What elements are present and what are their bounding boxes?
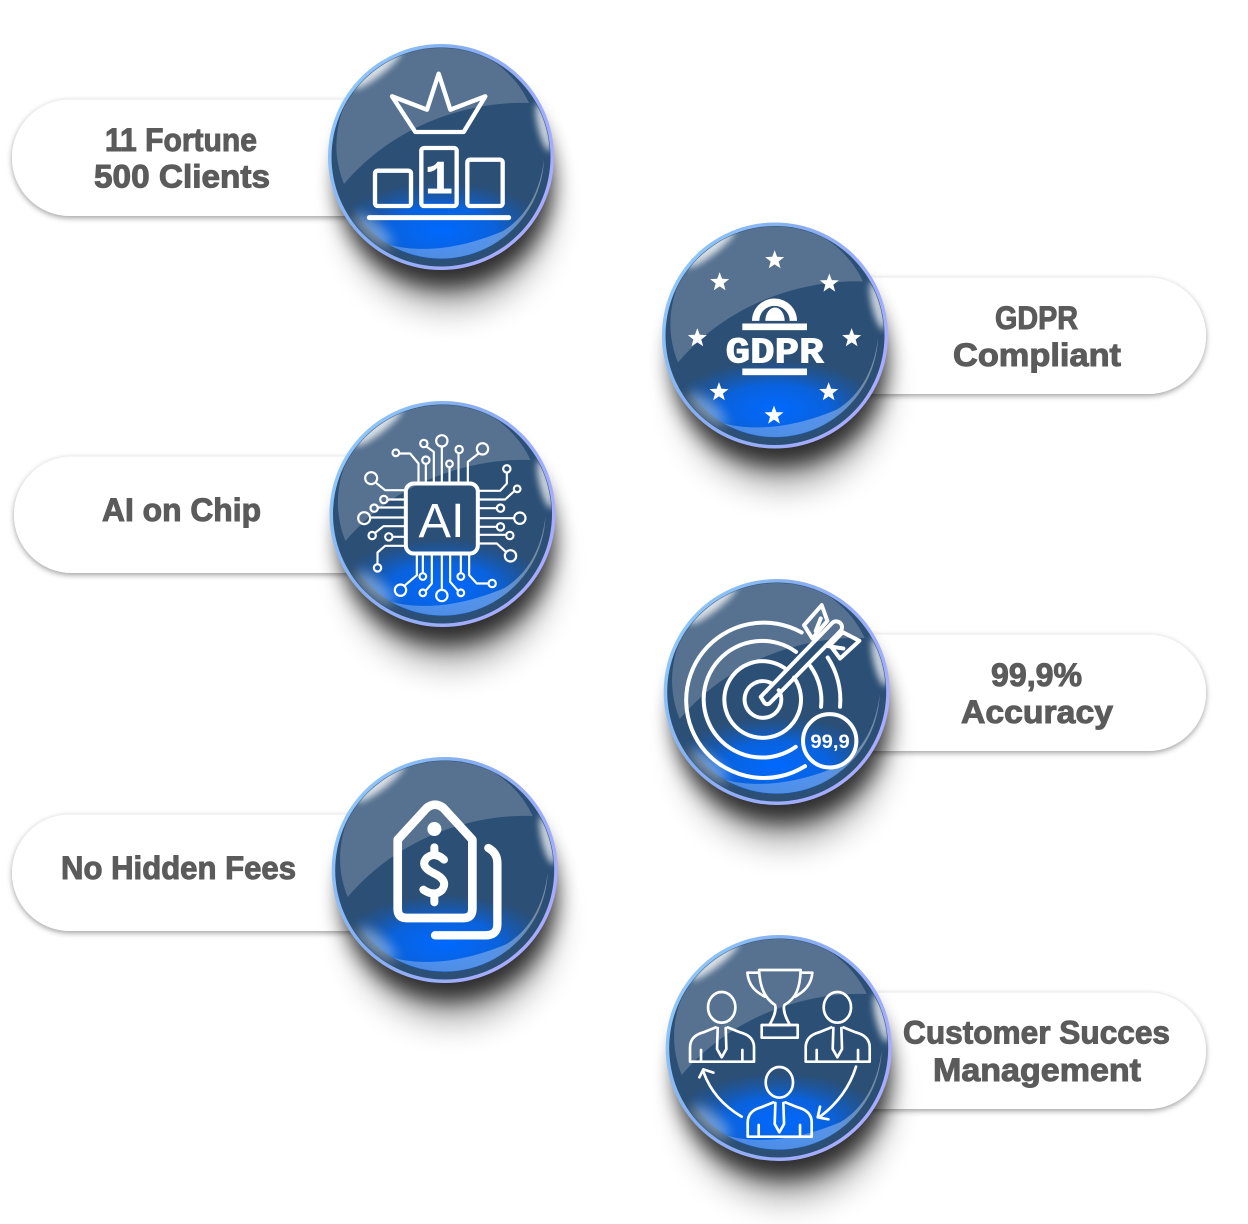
pill: fees [12, 814, 412, 931]
badge: GDPR stars [662, 222, 890, 486]
label: customer: Management [933, 1052, 1141, 1088]
pill: gdpr [806, 278, 1206, 394]
label: accuracy: Accuracy [961, 694, 1113, 730]
label: customer: Customer Succes [903, 1014, 1170, 1050]
icon: GDPR padlock with stars: GDPR [726, 332, 824, 373]
label: fortune [94, 122, 270, 194]
icon: AI chip circuit [358, 435, 525, 601]
icon: crown on podium: 1 [424, 153, 454, 209]
icon: crown on podium [369, 74, 509, 218]
icon: target with arrow and 99,9: 99,9 [810, 732, 850, 753]
badge: team and trophy [666, 935, 894, 1198]
label: customer [903, 1014, 1170, 1088]
label: ai: AI on Chip [102, 492, 261, 528]
badge: target [664, 579, 892, 842]
badge: AI chip [330, 401, 557, 664]
panel: Customer Succes Management [666, 935, 1206, 1198]
pill: fortune [12, 100, 412, 216]
panel: GDPR Compliant [662, 222, 1206, 486]
icon: team with trophy [690, 970, 870, 1137]
icon: dollar price tag [398, 805, 497, 935]
panel: 11 Fortune 500 Clients [12, 44, 556, 307]
icon: GDPR padlock with stars [688, 250, 861, 424]
pill: accuracy [806, 634, 1206, 751]
panel: AI on Chip [14, 401, 557, 664]
badge: podium and crown [328, 44, 556, 307]
label: fees: No Hidden Fees [61, 850, 296, 886]
icon: target with arrow and 99,9 [686, 605, 859, 778]
icon: AI chip circuit: AI [419, 494, 464, 548]
label: fortune: 11 Fortune [105, 122, 257, 158]
label: accuracy: 99,9% [991, 657, 1082, 693]
pill: customer [806, 992, 1206, 1109]
badge: price tag [332, 757, 560, 1020]
panel: 99,9% Accuracy [664, 579, 1206, 842]
label: gdpr: GDPR [995, 300, 1078, 336]
label: gdpr: Compliant [953, 337, 1121, 373]
label: accuracy [961, 657, 1113, 730]
pill: ai [14, 456, 414, 573]
label: gdpr [953, 300, 1121, 373]
label: fortune: 500 Clients [94, 158, 270, 194]
panel: No Hidden Fees [12, 757, 560, 1020]
